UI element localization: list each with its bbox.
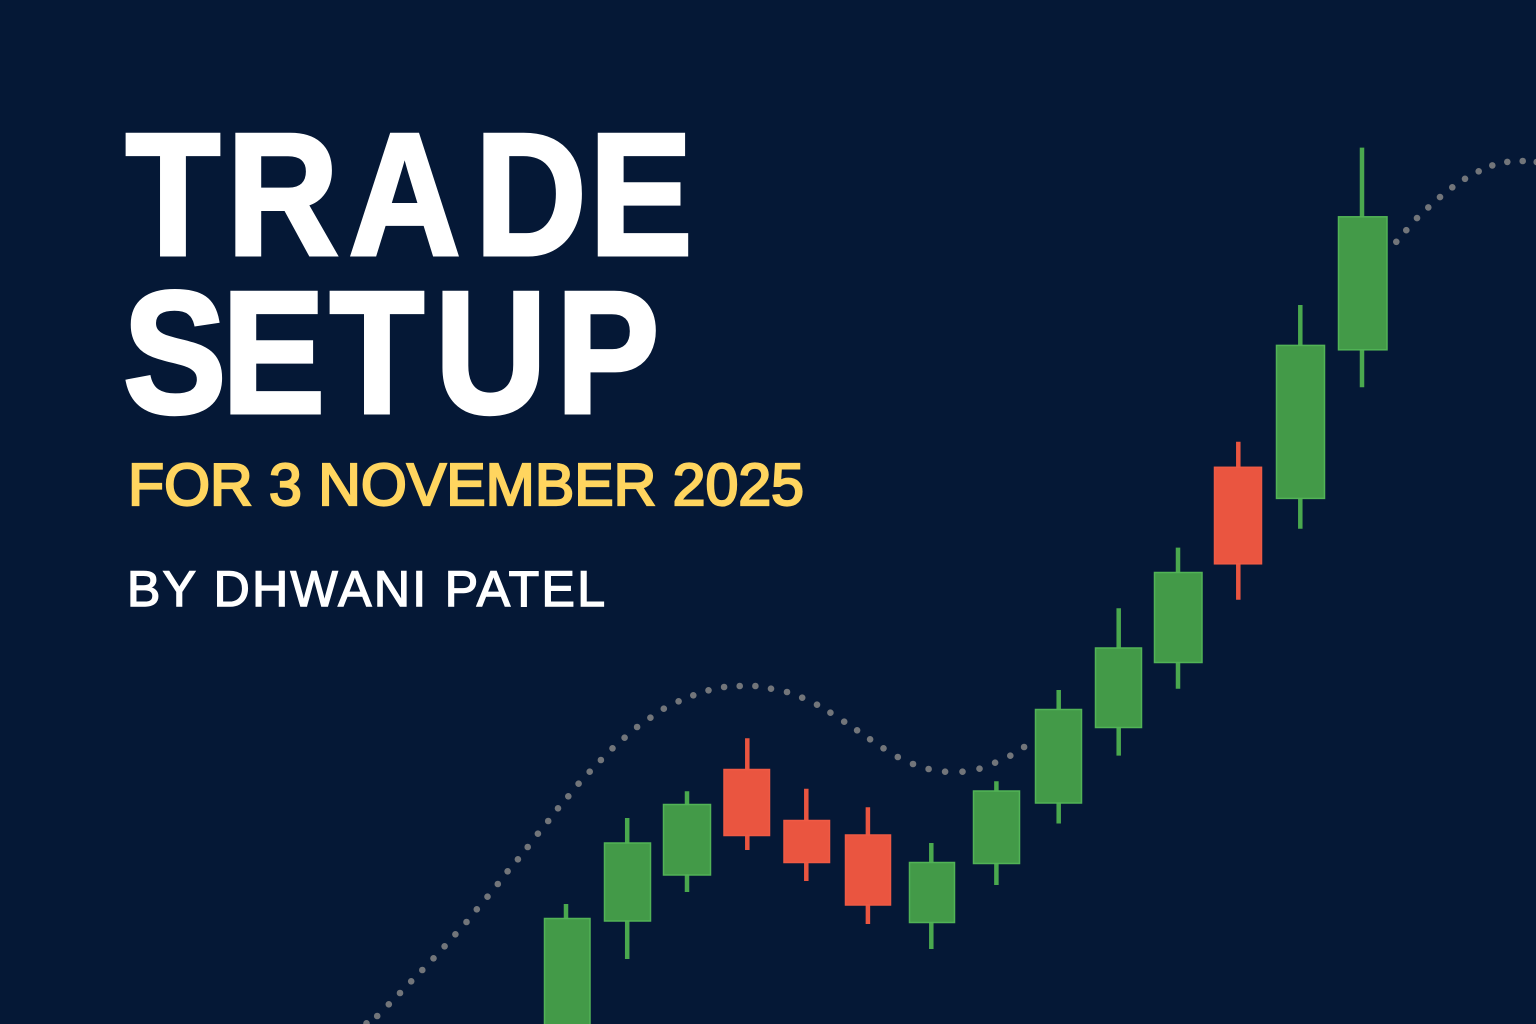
candle 3: green [664, 791, 710, 892]
author byline: BY DHWANI PATEL [127, 561, 605, 617]
title: Trade Setup [123, 97, 692, 449]
candle 12: red [1214, 442, 1262, 600]
candle 5: red [784, 789, 830, 881]
subtitle: date: FOR 3 NOVEMBER 2025 [128, 452, 804, 518]
candle 14: green [1338, 148, 1387, 387]
dotted trend line [363, 158, 1536, 1024]
title: Trade Setup: SETUP [123, 255, 659, 449]
candle 13: green [1276, 305, 1324, 529]
candle 8: green [974, 781, 1020, 885]
candle 1: green [544, 904, 590, 1024]
candle 2: green [604, 818, 650, 959]
title: Trade Setup: TRADE [126, 97, 692, 291]
candle 6: red [846, 807, 890, 924]
candlestick chart [544, 148, 1387, 1024]
candle 7: green [910, 843, 954, 949]
candle 4: red [724, 738, 770, 850]
candle 9: green [1036, 690, 1082, 824]
candle 10: green [1096, 608, 1142, 756]
candle 11: green [1154, 548, 1202, 689]
